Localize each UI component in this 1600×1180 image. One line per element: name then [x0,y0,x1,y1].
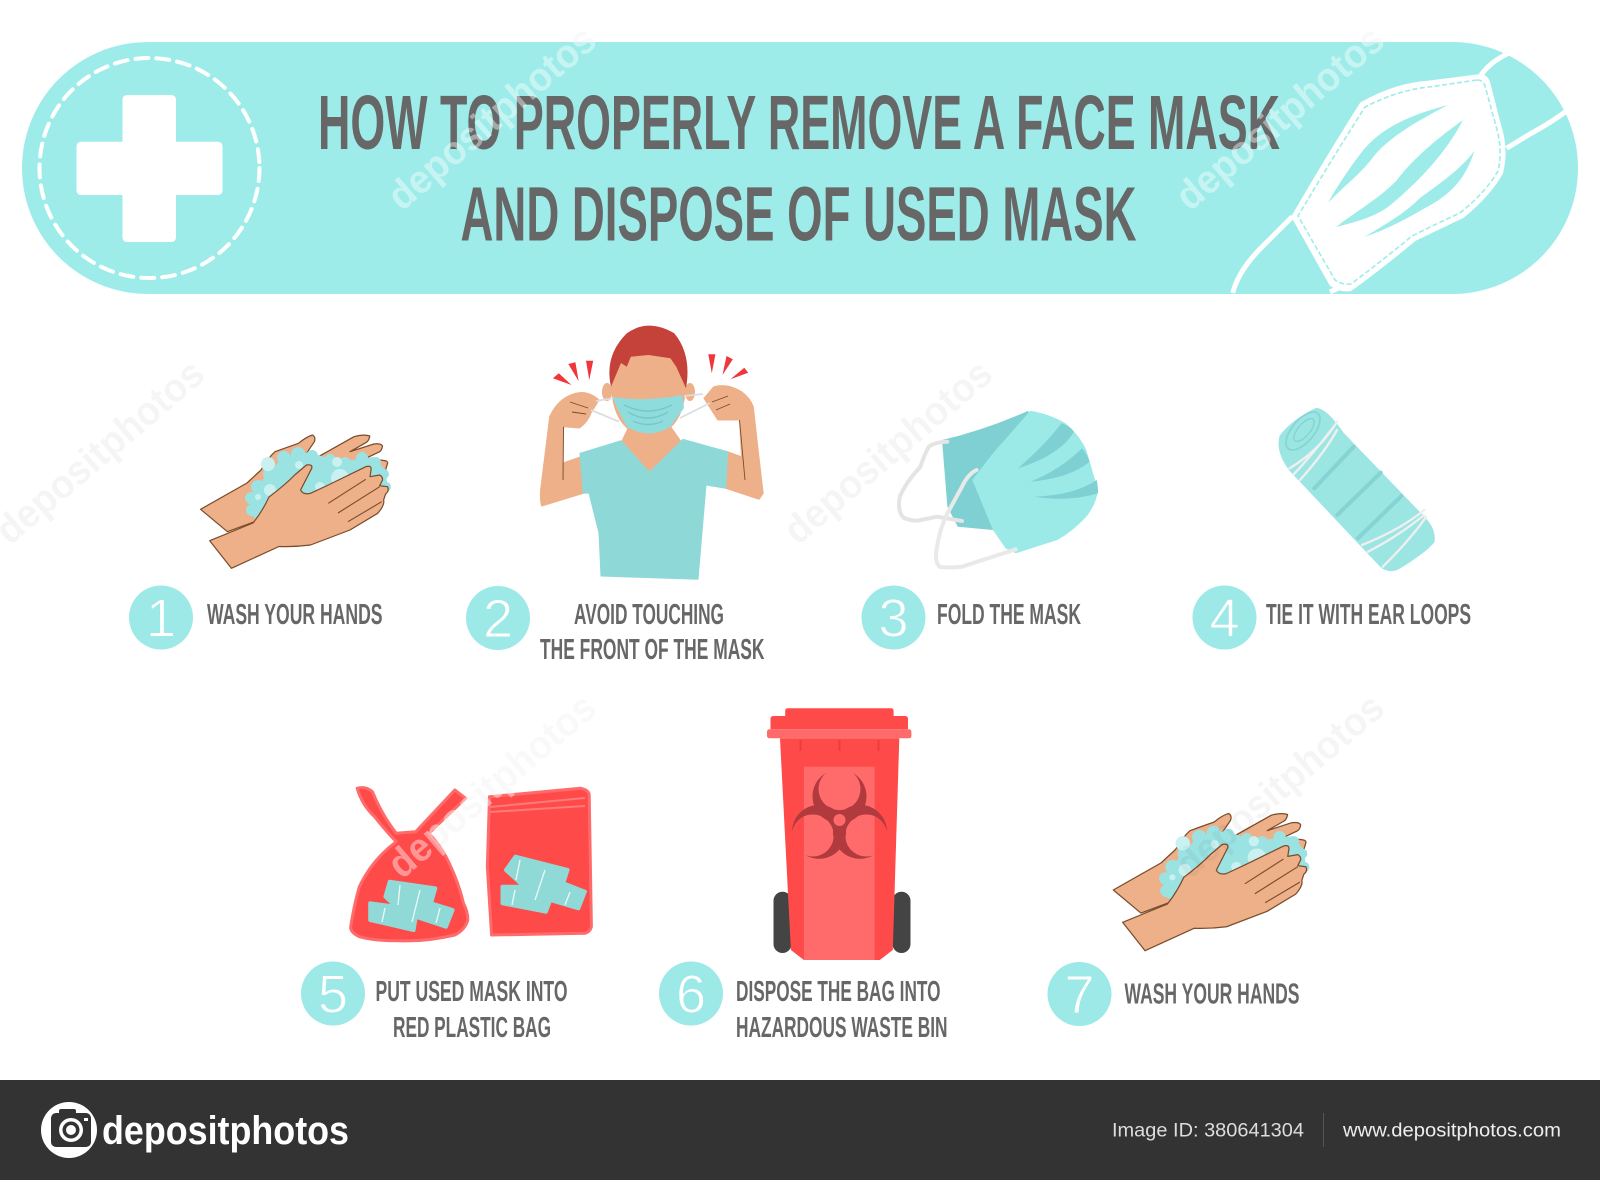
step 2: avoid touching the front of the mask [466,326,765,666]
illustration: person removing mask [540,326,763,579]
illustration: red biohazard bin [767,708,911,960]
text: depositphotos [379,17,605,219]
number badge 1: 1 [146,588,176,648]
icon: medical cross [40,58,260,278]
label: DISPOSE THE BAG INTO [736,976,940,1008]
label: WASH YOUR HANDS [207,599,382,631]
label [736,976,948,1044]
logo: camera badge [41,1102,97,1158]
number badge 6 [659,962,723,1026]
label: PUT USED MASK INTO [376,976,568,1008]
illustration: folded mask [899,411,1098,567]
number badge 3 [862,586,926,650]
illustration: tied red bag with masks [351,788,468,941]
label: THE FRONT OF THE MASK [540,634,765,666]
logo: wordmark: depositphotos [102,1109,349,1153]
label [540,599,765,666]
text: depositphotos [379,685,605,887]
label: FOLD THE MASK [937,599,1081,631]
illustration: flat red bag with masks [487,788,591,935]
title: AND DISPOSE OF USED MASK [460,172,1136,258]
number badge 2 [466,586,530,650]
label: RED PLASTIC BAG [393,1012,551,1044]
number badge 2: 2 [483,589,513,649]
text: depositphotos [1167,17,1393,219]
number badge 1 [129,586,193,650]
step 5: put used mask into red plastic bag [301,788,591,1044]
number badge 3: 3 [878,588,909,648]
icon: biohazard symbol [785,773,894,867]
number badge 4 [1192,586,1256,650]
label: AVOID TOUCHING [574,599,724,631]
header banner [22,42,1578,294]
text: depositphotos [379,685,605,887]
text: depositphotos [1167,685,1393,887]
number badge 5: 5 [318,964,348,1024]
number badge 6: 6 [676,964,706,1024]
illustration: rolled mask [1279,406,1434,571]
step 1: wash your hands [129,435,391,650]
icon: soapy hands [201,435,391,568]
step 6: dispose the bag into hazardous waste bin [659,708,948,1044]
text: depositphotos [1167,17,1393,219]
number badge 5 [301,962,365,1026]
number badge 7: 7 [1064,965,1095,1025]
icon: white face mask [1233,53,1565,293]
website url: www.depositphotos.com [1342,1120,1561,1142]
number badge 4: 4 [1209,588,1240,648]
label: WASH YOUR HANDS [1124,978,1300,1010]
image id: Image ID: 380641304 [1112,1120,1304,1142]
footer bar [0,1080,1600,1180]
step 7: wash your hands [1048,813,1309,1026]
label: HAZARDOUS WASTE BIN [736,1012,948,1044]
title [318,80,1280,258]
banner background [22,42,1578,294]
number badge 7 [1048,962,1112,1026]
text: depositphotos [379,17,605,219]
step 4: tie it with ear loops [1192,406,1471,650]
label: TIE IT WITH EAR LOOPS [1266,599,1471,631]
text: depositphotos [775,351,1001,553]
icon: soapy hands [1113,813,1309,951]
step 3: fold the mask [862,411,1098,650]
label [376,976,568,1044]
